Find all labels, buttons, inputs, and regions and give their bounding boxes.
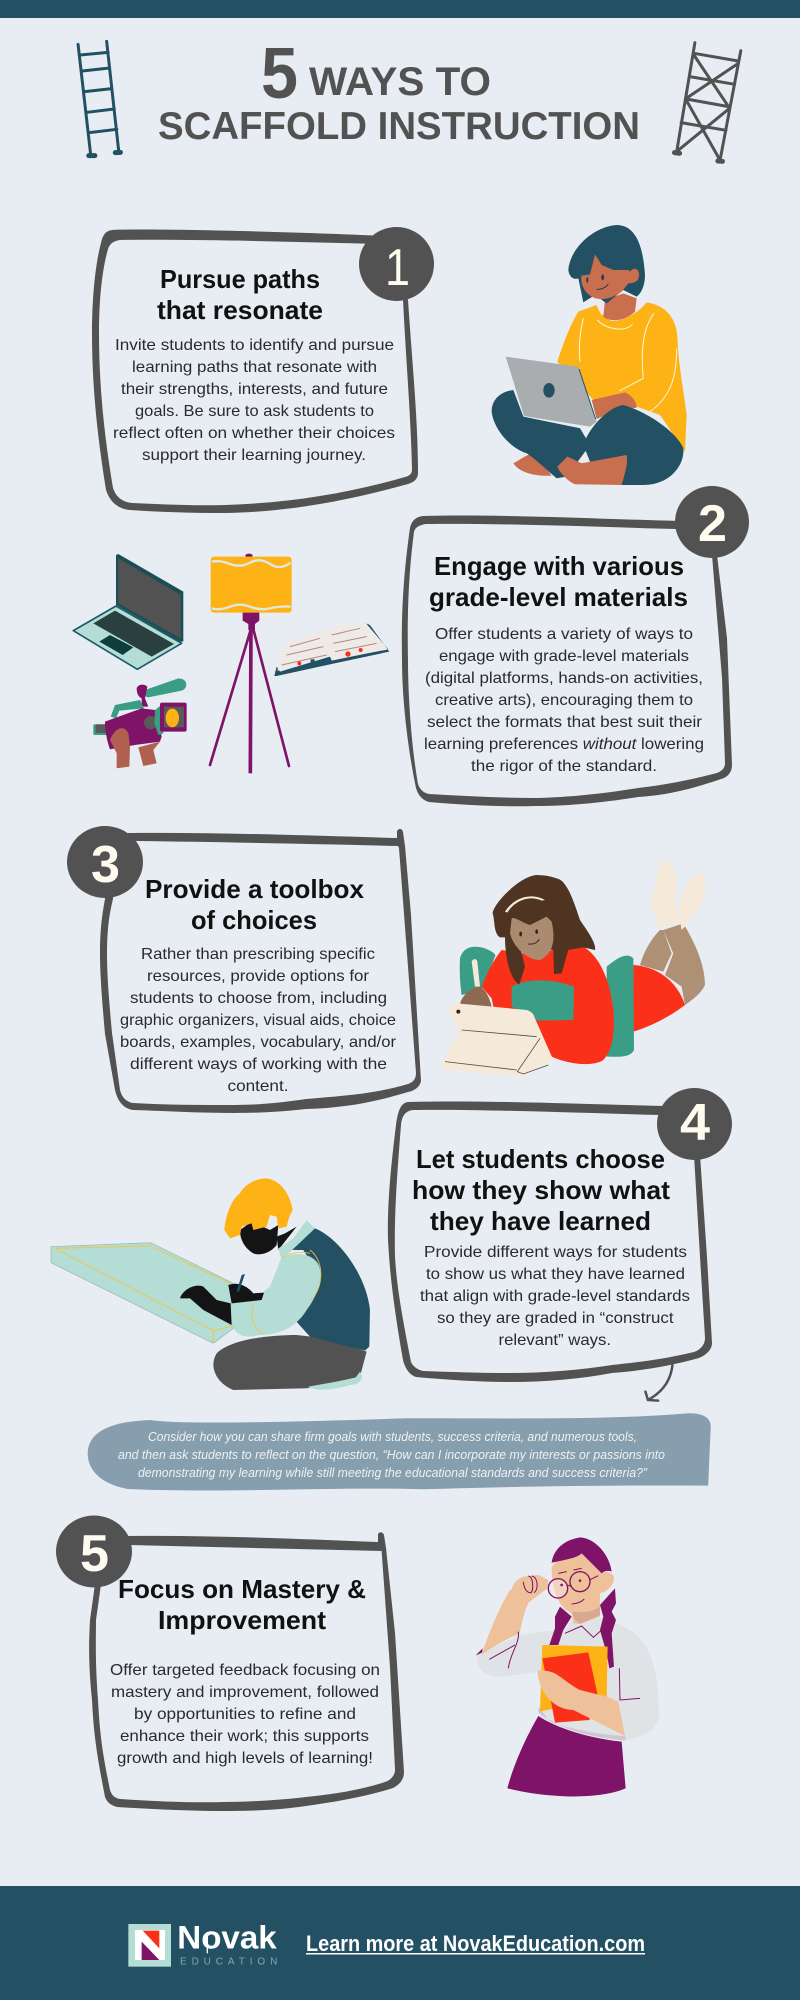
body text 1: reflect often on whether their choices bbox=[113, 425, 395, 442]
number badge 2: 2 bbox=[698, 495, 727, 553]
body text 4: that align with grade-level standards bbox=[420, 1288, 690, 1305]
body text 5: by opportunities to refine and bbox=[134, 1706, 356, 1723]
heading 4: how they show what bbox=[412, 1175, 670, 1205]
illustration: student lying with tablet bbox=[442, 859, 705, 1077]
panel: step 4 bbox=[388, 1088, 732, 1382]
body text 2: engage with grade-level materials bbox=[439, 648, 689, 665]
body text 4: to show us what they have learned bbox=[426, 1266, 685, 1283]
body text 5: Offer targeted feedback focusing on bbox=[110, 1662, 380, 1679]
heading 1 bbox=[157, 264, 323, 325]
heading 4: they have learned bbox=[430, 1206, 651, 1236]
body text 1: learning paths that resonate with bbox=[132, 359, 377, 376]
number badge 5: 5 bbox=[80, 1525, 109, 1583]
panel: step 5 bbox=[56, 1516, 404, 1811]
title: 5 bbox=[261, 34, 298, 114]
body text 4: Provide different ways for students bbox=[424, 1244, 687, 1261]
icon: tripod lamp bbox=[210, 554, 292, 773]
body text 3: Rather than prescribing specific bbox=[141, 946, 375, 963]
title: SCAFFOLD INSTRUCTION bbox=[158, 105, 640, 148]
panel: step 3 bbox=[67, 826, 421, 1113]
card frame 3 bbox=[100, 829, 421, 1113]
heading 5 bbox=[118, 1574, 366, 1635]
body text 3: students to choose from, including bbox=[130, 990, 387, 1007]
icon: ladder bbox=[78, 41, 120, 156]
heading 4: Let students choose bbox=[416, 1144, 665, 1174]
logo: Novak bbox=[177, 1919, 277, 1955]
body text 1 bbox=[113, 337, 395, 464]
body text 1: their strengths, interests, and future bbox=[121, 381, 388, 398]
number badge 2 bbox=[675, 486, 749, 558]
heading 2: grade-level materials bbox=[429, 582, 688, 612]
body text 3: content. bbox=[228, 1078, 288, 1095]
body text 2 bbox=[424, 626, 704, 775]
icon: video camera with hands bbox=[93, 678, 187, 768]
callout: demonstrating my learning while still meeting the educational standards and success criteria?” bbox=[138, 1465, 648, 1480]
panel: step 2 bbox=[402, 486, 749, 806]
heading 1: that resonate bbox=[157, 295, 323, 325]
illustration: student with laptop bbox=[492, 225, 687, 485]
number badge 1 bbox=[359, 227, 434, 301]
heading 5: Focus on Mastery & bbox=[118, 1574, 366, 1604]
heading 2: Engage with various bbox=[434, 551, 684, 581]
card frame 5 bbox=[89, 1532, 404, 1811]
body text 2: (digital platforms, hands-on activities, bbox=[425, 670, 703, 687]
heading 3: of choices bbox=[191, 905, 317, 935]
body text 3: resources, provide options for bbox=[147, 968, 370, 985]
number badge 3: 3 bbox=[91, 836, 120, 894]
body text 1: goals. Be sure to ask students to bbox=[135, 403, 374, 420]
title: WAYS TO bbox=[309, 60, 491, 104]
number badge 4: 4 bbox=[680, 1094, 710, 1152]
logo bbox=[128, 1919, 277, 1967]
illustration: student drawing at a board bbox=[51, 1178, 370, 1390]
heading 1: Pursue paths bbox=[160, 264, 320, 294]
footer bbox=[0, 1886, 800, 2000]
body text 3 bbox=[120, 946, 397, 1095]
panel: step 1 bbox=[92, 227, 434, 513]
heading 3: Provide a toolbox bbox=[145, 874, 365, 904]
body text 2: the rigor of the standard. bbox=[471, 758, 657, 775]
body text 3: different ways of working with the bbox=[130, 1056, 387, 1073]
body text 4: so they are graded in “construct bbox=[437, 1310, 674, 1327]
body text 2: select the formats that best suit their bbox=[427, 714, 703, 731]
number badge 1: 1 bbox=[385, 239, 410, 297]
body text 4 bbox=[420, 1244, 690, 1349]
heading 2 bbox=[429, 551, 688, 612]
body text 3: graphic organizers, visual aids, choice bbox=[120, 1012, 396, 1029]
card frame 2 bbox=[402, 516, 732, 806]
title bbox=[158, 34, 640, 148]
body text 5: growth and high levels of learning! bbox=[117, 1750, 373, 1767]
logo: EDUCATION bbox=[180, 1956, 277, 1967]
heading 5: Improvement bbox=[158, 1605, 326, 1635]
body text 2: Offer students a variety of ways to bbox=[435, 626, 693, 643]
body text 2: learning preferences without lowering bbox=[424, 736, 704, 753]
number badge 5 bbox=[56, 1516, 132, 1588]
icon: scaffold tower bbox=[674, 43, 741, 161]
number badge 3 bbox=[67, 826, 143, 898]
body text 3: boards, examples, vocabulary, and/or bbox=[120, 1034, 397, 1051]
card frame 1 bbox=[92, 229, 418, 513]
number badge 4 bbox=[657, 1088, 732, 1160]
icon: laptop bbox=[73, 554, 183, 669]
body text 5: mastery and improvement, followed bbox=[111, 1684, 379, 1701]
arrow bbox=[645, 1365, 672, 1401]
heading 3 bbox=[145, 874, 365, 935]
illustration: student with glasses and books bbox=[476, 1537, 659, 1796]
callout bbox=[88, 1413, 711, 1490]
card frame 4 bbox=[388, 1101, 712, 1382]
body text 5: enhance their work; this supports bbox=[120, 1728, 369, 1745]
heading 4 bbox=[412, 1144, 670, 1236]
icon: open book bbox=[274, 623, 389, 676]
body text 2: creative arts), encouraging them to bbox=[435, 692, 693, 709]
callout: Consider how you can share firm goals with students, success criteria, and numerous tools, bbox=[148, 1429, 637, 1444]
body text 1: Invite students to identify and pursue bbox=[115, 337, 394, 354]
body text 5 bbox=[110, 1662, 380, 1767]
link: Learn more at NovakEducation.com bbox=[306, 1931, 645, 1956]
body text 1: support their learning journey. bbox=[142, 447, 366, 464]
body text 4: relevant” ways. bbox=[498, 1332, 611, 1349]
top bar bbox=[0, 0, 800, 18]
callout: and then ask students to reflect on the question, “How can I incorporate my interests or passions into bbox=[118, 1447, 665, 1462]
illustration: learning materials bbox=[73, 554, 389, 773]
